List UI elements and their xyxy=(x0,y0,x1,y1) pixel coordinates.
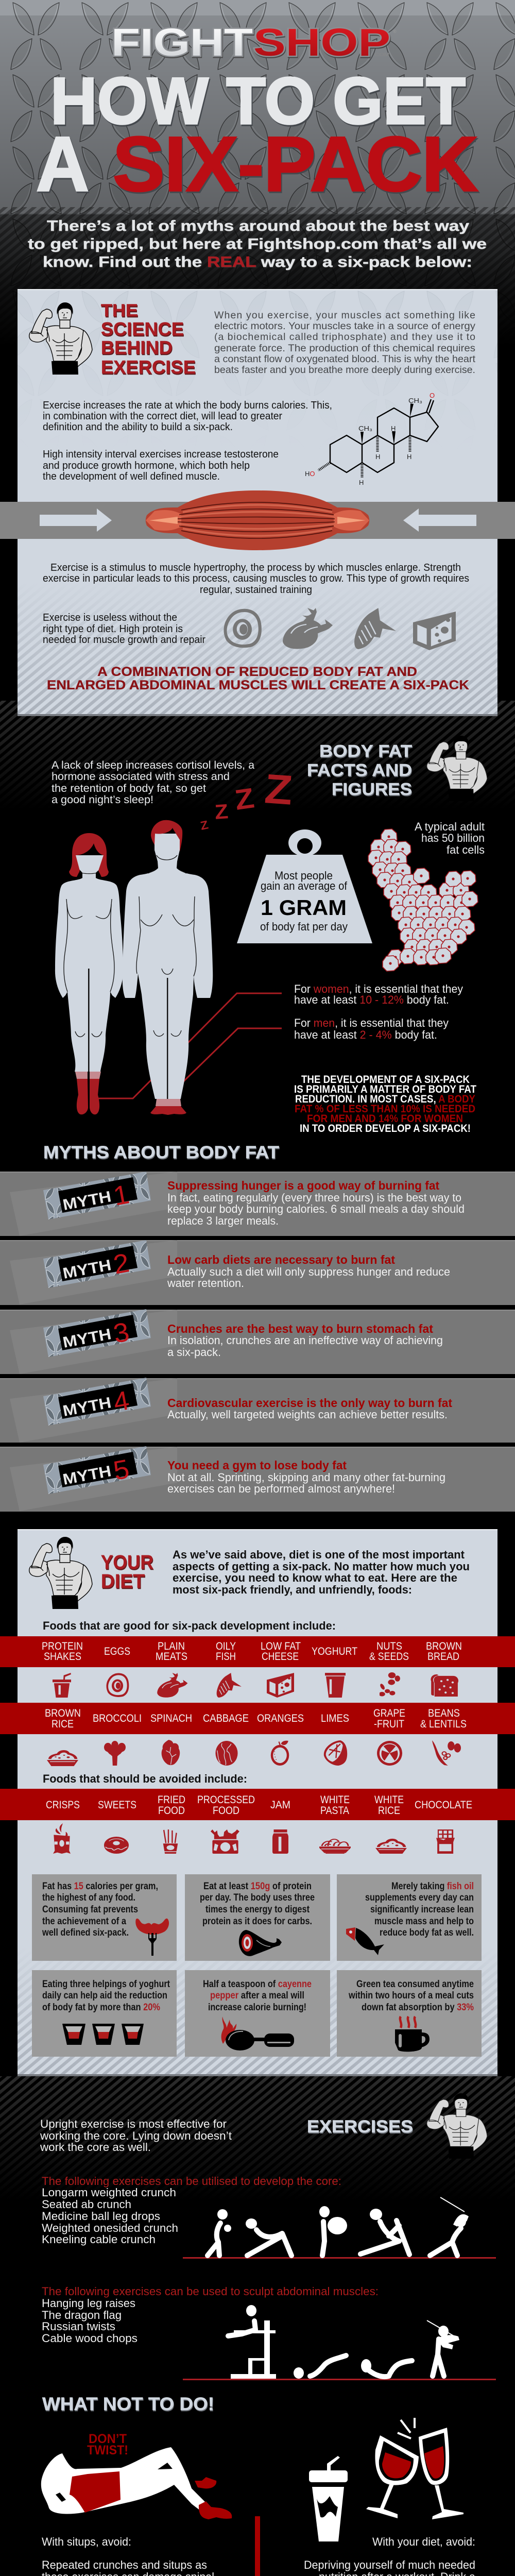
text: lack of sleep: hormone associated with stress and xyxy=(52,771,230,783)
panel: myth 3 xyxy=(0,1309,515,1374)
icon: muscle man diet xyxy=(29,1537,92,1609)
band: good foods labels row 1: MEATS xyxy=(156,1651,187,1663)
icon: sausage on fork xyxy=(135,1919,169,1956)
panel: myth 2: Low carb diets are necessary to burn fat xyxy=(167,1253,395,1266)
panel: myth 1 xyxy=(0,1172,515,1236)
text: calories and hormones xyxy=(43,400,332,482)
card: protein: Eat at least 150g of protein xyxy=(203,1880,312,1892)
band: good foods labels row 2: LIMES xyxy=(321,1713,349,1724)
text: diet and protein: needed for muscle growth and repair xyxy=(43,634,205,646)
icons: good foods row 2 xyxy=(47,1740,461,1766)
text: when you exercise: (a biochemical called triphosphate) and they use it to xyxy=(214,331,475,343)
logo: FightShop top: ® xyxy=(393,29,397,34)
heading: your diet: YOUR xyxy=(101,1552,153,1573)
panel: myth 4 xyxy=(0,1378,515,1443)
text: sculpting exercises list: Hanging leg raises xyxy=(42,2297,135,2310)
icon: muscle man light xyxy=(427,736,487,801)
heading: body fat facts and figures: FACTS AND xyxy=(307,760,412,779)
text: fat cells: has 50 billion xyxy=(421,832,485,844)
text: lack of sleep: the retention of body fat, so get xyxy=(52,783,206,794)
band: good foods labels row 2: & LENTILS xyxy=(420,1718,467,1730)
band: foods to avoid labels: SWEETS xyxy=(98,1799,136,1811)
panel: myth 2: Actually such a diet will only suppress hunger and reduce xyxy=(167,1265,450,1278)
band: good foods labels row 1: FISH xyxy=(216,1651,236,1663)
intro text: to get ripped, but here at Fightshop.com that’s all we xyxy=(28,236,487,252)
card: protein: per day. The body uses three xyxy=(200,1892,315,1903)
icon: three glasses xyxy=(62,2024,144,2045)
card: fat calories: Fat has 15 calories per gram, xyxy=(42,1880,158,1892)
icon: weight with 1 gram text xyxy=(237,829,372,943)
icon: sleeping z letters: Z xyxy=(199,818,210,833)
icon: weight with 1 gram text: 1 GRAM xyxy=(261,895,347,920)
band: good foods labels row 1: & SEEDS xyxy=(369,1651,409,1663)
card: fish oil xyxy=(337,1874,482,1961)
panel: myth 1: In fact, eating regularly (every three hours) is the best way to xyxy=(167,1191,461,1204)
card: cayenne xyxy=(185,1970,330,2057)
intro text: There’s a lot of myths around about the best way xyxy=(47,218,469,234)
panel: myth 5: You need a gym to lose body fat xyxy=(167,1459,347,1472)
intro text: know. Find out the REAL way to a six-pack below: xyxy=(43,254,472,270)
text: core exercises list: Longarm weighted crunch xyxy=(42,2186,176,2199)
chart: testosterone molecule: HO xyxy=(305,470,315,478)
card: green tea: down fat absorption by 33% xyxy=(362,2002,474,2013)
card: cayenne: pepper after a meal will xyxy=(210,1990,304,2001)
text: calories and hormones: the development of well defined muscle. xyxy=(43,471,220,482)
icon: core exercise figures xyxy=(183,2197,496,2259)
band: grey contraction bar xyxy=(0,502,515,539)
text: core exercises list xyxy=(42,2175,341,2246)
text: diet and protein: right type of diet. High protein is xyxy=(43,623,183,635)
callout: six-pack development: FAT % OF LESS THAN 10% IS NEEDED xyxy=(295,1103,475,1115)
chart: testosterone molecule: H xyxy=(375,453,380,461)
card: cayenne: Half a teaspoon of cayenne xyxy=(203,1978,312,1990)
text: upright exercise: Upright exercise is most effective for xyxy=(40,2117,227,2130)
panel: myth 3: MYTH xyxy=(61,1326,113,1351)
band: good foods labels row 1: NUTS xyxy=(376,1640,402,1652)
card: fish oil: supplements every day can xyxy=(365,1892,474,1903)
divider: red vertical line xyxy=(255,2516,260,2576)
text: essential body fat: For men, it is essential that they xyxy=(294,1016,449,1029)
card: protein: protein as it does for carbs. xyxy=(202,1916,312,1927)
subheading: good foods: Foods that are good for six-pack development include: xyxy=(43,1619,336,1632)
callout: six-pack development: IN TO ORDER DEVELOP A SIX-PACK! xyxy=(300,1123,471,1134)
chart: testosterone molecule: CH₃ xyxy=(358,425,372,432)
band: good foods labels row 1: BREAD xyxy=(427,1651,459,1663)
heading: the science behind exercise: BEHIND xyxy=(101,337,173,358)
text: essential body fat: For women, it is essential that they xyxy=(294,982,463,995)
icons: foods to avoid xyxy=(53,1823,455,1854)
text: calories and hormones: High intensity interval exercises increase testosterone xyxy=(43,449,279,460)
callout: six-pack development: IS PRIMARILY A MATTER OF BODY FAT xyxy=(294,1083,476,1095)
card: fat calories: Consuming fat prevents xyxy=(42,1904,138,1915)
icon: weight with 1 gram text: of body fat per day xyxy=(260,920,348,933)
icon: sculpting exercise figures xyxy=(183,2305,496,2380)
band: good foods labels row 1: CHEESE xyxy=(262,1651,299,1663)
text: with your diet avoid xyxy=(303,2535,476,2576)
text: core exercises list: Weighted onesided crunch xyxy=(42,2222,178,2234)
text: lack of sleep: A lack of sleep increases cortisol levels, a xyxy=(52,759,254,771)
text: with your diet avoid: Depriving yourself of much needed xyxy=(304,2558,475,2571)
panel: myth 3: In isolation, crunches are an ineffective way of achieving xyxy=(167,1334,443,1347)
band: good foods labels row 1: YOGHURT xyxy=(312,1646,357,1657)
arrow: left-pointing xyxy=(403,509,476,532)
logo: FightShop top: FIGHT xyxy=(111,21,253,64)
text: core exercises list: Seated ab crunch xyxy=(42,2198,131,2211)
label: don't twist: DON’T xyxy=(89,2432,127,2446)
subheading: foods to avoid: Foods that should be avoided include: xyxy=(43,1772,247,1785)
panel: myth 3: 3 xyxy=(111,1317,132,1349)
icon: muscle man exercises xyxy=(427,2093,487,2159)
band: foods to avoid labels: WHITE xyxy=(374,1794,404,1806)
band: foods to avoid labels: RICE xyxy=(378,1805,400,1817)
icon: fat cells cluster xyxy=(368,829,478,971)
text: diet intro: As we’ve said above, diet is one of the most important xyxy=(173,1548,465,1561)
band: good foods labels row 2: GRAPE xyxy=(373,1707,405,1719)
text: when you exercise: a constant flow of oxygenated blood. This is why the heart xyxy=(214,353,476,365)
band: good foods labels row 1: BROWN xyxy=(426,1640,462,1652)
chart: testosterone molecule: O xyxy=(430,392,435,399)
logo: FightShop top: SHOP xyxy=(253,21,390,64)
intro text xyxy=(28,218,487,270)
callout: six-pack development xyxy=(294,1074,476,1134)
band: foods to avoid labels: WHITE xyxy=(320,1794,350,1806)
card: yoghurt: of body fat by more than 20% xyxy=(42,2002,160,2013)
band: good foods labels row 2: SPINACH xyxy=(150,1713,192,1724)
card: fat calories: well defined six-pack. xyxy=(42,1927,129,1938)
text: calories and hormones: in combination with the correct diet, will lead to greater xyxy=(43,411,282,422)
band: foods to avoid labels xyxy=(0,1789,515,1820)
card: green tea: within two hours of a meal cuts xyxy=(348,1990,474,2001)
text: diet intro xyxy=(173,1548,470,1596)
panel: myth 5: MYTH xyxy=(61,1463,113,1488)
panel: myth 5: Not at all. Sprinting, skipping and many other fat-burning xyxy=(167,1471,445,1484)
icon: flexing muscle man xyxy=(29,302,92,375)
icon: muscle xyxy=(146,490,369,550)
band: good foods labels row 1: OILY xyxy=(216,1640,236,1652)
panel: myth 2 xyxy=(0,1240,515,1305)
band: good foods labels row 1: EGGS xyxy=(104,1646,130,1657)
text: when you exercise: electric motors. Your muscles take in a source of energy xyxy=(214,320,475,332)
label: don't twist xyxy=(87,2432,128,2458)
panel: myth 1: Suppressing hunger is a good way of burning fat xyxy=(167,1179,439,1192)
panel: myth 4: MYTH xyxy=(61,1394,113,1420)
text: hypertrophy: Exercise is a stimulus to muscle hypertrophy, the process by which muscles enlarge. Strength xyxy=(50,562,461,573)
panel: myth 4: 4 xyxy=(111,1385,132,1418)
text: fat cells: fat cells xyxy=(447,843,485,856)
card: green tea xyxy=(337,1970,482,2057)
band: foods to avoid labels: CRISPS xyxy=(46,1799,80,1811)
text: with your diet avoid: With your diet, avoid: xyxy=(372,2535,475,2548)
card: fish oil: reduce body fat as well. xyxy=(380,1927,474,1938)
text: core exercises list: The following exercises can be utilised to develop the core: xyxy=(42,2175,341,2188)
text: sculpting exercises list: The dragon flag xyxy=(42,2309,122,2321)
heading: the science behind exercise: SCIENCE xyxy=(101,318,184,340)
icon: sleeping z letters: Z xyxy=(214,800,229,824)
band: good foods labels row 1: PLAIN xyxy=(158,1640,185,1652)
card: fish oil: Merely taking fish oil xyxy=(391,1880,474,1892)
band: good foods labels row 2: BROWN xyxy=(45,1707,81,1719)
text: when you exercise xyxy=(214,310,476,376)
icon: mug with steam xyxy=(395,2016,430,2052)
heading: body fat facts and figures: BODY FAT xyxy=(319,741,412,760)
text: sculpting exercises list: The following exercises can be used to sculpt abdominal muscles: xyxy=(42,2285,379,2298)
band: good foods labels row 1: SHAKES xyxy=(44,1651,81,1663)
icon: black fish xyxy=(346,1927,384,1955)
icon: situp figure xyxy=(41,2447,232,2519)
callout: combination: A COMBINATION OF REDUCED BODY FAT AND xyxy=(97,665,417,679)
panel: myth 1: MYTH xyxy=(61,1188,113,1214)
card: protein xyxy=(185,1874,330,1961)
title: How to get a six-pack xyxy=(36,64,478,207)
panel: myth 4: Cardiovascular exercise is the only way to burn fat xyxy=(167,1396,452,1410)
panel: myth 5 xyxy=(0,1446,515,1512)
heading: the science behind exercise: THE xyxy=(101,301,138,320)
panel: myth 1: replace 3 larger meals. xyxy=(167,1214,279,1227)
band: foods to avoid labels: PROCESSED xyxy=(197,1794,255,1806)
icon: sleeping z letters: Z xyxy=(233,782,256,816)
card: green tea: Green tea consumed anytime xyxy=(356,1978,474,1990)
text: fat cells: A typical adult xyxy=(415,820,485,833)
background: stripes below diet panel xyxy=(0,2076,515,2200)
card: fish oil: significantly increase lean xyxy=(370,1904,474,1915)
text: diet and protein: Exercise is useless without the xyxy=(43,612,177,623)
band: foods to avoid labels: FOOD xyxy=(158,1805,185,1817)
panel: myth 4: Actually, well targeted weights can achieve better results. xyxy=(167,1408,448,1421)
text: hypertrophy: regular, sustained training xyxy=(200,584,312,596)
connector lines: figures to body fat text xyxy=(98,993,282,1098)
card: cayenne: increase calorie burning! xyxy=(208,2002,306,2013)
panel: myth 1: keep your body burning calories. 6 small meals a day should xyxy=(167,1202,465,1215)
card: yoghurt xyxy=(32,1970,177,2057)
panel: myth 2: 2 xyxy=(111,1248,132,1280)
heading: your diet: DIET xyxy=(101,1571,145,1592)
panel: myth 3: Crunches are the best way to burn stomach fat xyxy=(167,1322,433,1335)
band: foods to avoid labels: JAM xyxy=(270,1799,290,1811)
text: calories and hormones: definition and the ability to build a six-pack. xyxy=(43,421,233,433)
text: lack of sleep xyxy=(52,759,254,806)
text: core exercises list: Medicine ball leg drops xyxy=(42,2210,160,2223)
text: upright exercise xyxy=(40,2117,232,2154)
heading: your diet xyxy=(101,1552,153,1592)
band: good foods labels row 2: BROCCOLI xyxy=(93,1713,142,1724)
heading: exercises: EXERCISES xyxy=(307,2117,413,2137)
text: sculpting exercises list: Cable wood chops xyxy=(42,2332,138,2345)
text: essential body fat xyxy=(294,982,463,1041)
figure: man xyxy=(123,820,213,1115)
text: with situps avoid: With situps, avoid: xyxy=(42,2535,131,2548)
chart: testosterone molecule: H xyxy=(391,425,396,432)
chart: testosterone molecule: H xyxy=(407,453,411,461)
icon: weight with 1 gram text: gain an average of xyxy=(261,879,348,892)
panel: myth 3: a six-pack. xyxy=(167,1346,221,1359)
callout: combination xyxy=(47,665,469,692)
text: lack of sleep: a good night’s sleep! xyxy=(52,794,153,806)
title: How to get a six-pack: HOW TO GET xyxy=(50,64,466,138)
card: fat calories: the highest of any food. xyxy=(42,1892,135,1903)
chart: testosterone molecule: CH₃ xyxy=(408,397,422,404)
band: good foods labels row 1: PROTEIN xyxy=(42,1640,83,1652)
text: calories and hormones: Exercise increases the rate at which the body burns calories. This, xyxy=(43,400,332,411)
icon: protein shake xyxy=(309,2456,348,2541)
panel: myth 5: 5 xyxy=(111,1454,132,1486)
panel: myth 1: 1 xyxy=(111,1179,132,1212)
figure: woman xyxy=(55,833,123,1114)
text: sculpting exercises list xyxy=(42,2285,379,2345)
chart: testosterone molecule: H xyxy=(359,479,364,486)
text: sculpting exercises list: Russian twists xyxy=(42,2320,115,2333)
heading: the science behind exercise: EXERCISE xyxy=(101,357,196,378)
panel: myth 5: exercises can be performed almost anywhere! xyxy=(167,1482,395,1495)
icon: spoon with flame xyxy=(221,2016,294,2050)
band: foods to avoid labels: CHOCOLATE xyxy=(415,1799,472,1811)
panel: your diet xyxy=(18,1529,497,2076)
card: fish oil: muscle mass and help to xyxy=(374,1916,474,1927)
band: good foods labels row 1 xyxy=(0,1636,515,1667)
band: good foods labels row 2: CABBAGE xyxy=(203,1713,249,1724)
band: good foods labels row 2: BEANS xyxy=(428,1707,460,1719)
text: upright exercise: work the core as well. xyxy=(40,2141,151,2154)
text: essential body fat: have at least 10 - 12% body fat. xyxy=(294,993,449,1006)
card: yoghurt: daily can help aid the reduction xyxy=(42,1990,167,2001)
band: good foods labels row 2: RICE xyxy=(52,1718,74,1730)
text: when you exercise: When you exercise, your muscles act something like xyxy=(214,310,475,321)
text: essential body fat: have at least 2 - 4% body fat. xyxy=(294,1028,437,1041)
icons: good foods row 1 xyxy=(53,1672,458,1698)
icon: wine glasses xyxy=(366,2418,464,2519)
heading: the science behind exercise xyxy=(101,301,196,378)
background: stripes below first panel xyxy=(0,701,515,809)
callout: six-pack development: THE DEVELOPMENT OF A SIX-PACK xyxy=(301,1074,470,1086)
icon: sleeping z letters: Z xyxy=(263,765,294,814)
icon: weight with 1 gram text: Most people xyxy=(274,869,333,882)
heading: myths about body fat: MYTHS ABOUT BODY FAT xyxy=(43,1143,279,1162)
text: core exercises list: Kneeling cable crunch xyxy=(42,2233,156,2246)
card: yoghurt: Eating three helpings of yoghurt xyxy=(42,1978,170,1990)
callout: combination: ENLARGED ABDOMINAL MUSCLES WILL CREATE A SIX-PACK xyxy=(47,678,469,692)
panel: the science behind exercise xyxy=(18,289,497,716)
text: hypertrophy: exercise in particular leads to this process, causing muscles to grow. This type of growth requires xyxy=(43,573,469,584)
callout: six-pack development: FOR MEN AND 14% FOR WOMEN xyxy=(307,1113,463,1125)
card: protein: times the energy to digest xyxy=(205,1904,310,1915)
band: good foods labels row 2: -FRUIT xyxy=(374,1718,404,1730)
text: diet intro: aspects of getting a six-pack. No matter how much you xyxy=(173,1560,470,1573)
background: top metal plate xyxy=(0,0,515,345)
band: foods to avoid labels: PASTA xyxy=(320,1805,349,1817)
panel: myth 2: water retention. xyxy=(167,1277,244,1290)
band: foods to avoid labels: FRIED xyxy=(158,1794,185,1806)
text: diet intro: most six-pack friendly, and unfriendly, foods: xyxy=(173,1583,412,1596)
band: good foods labels row 2 xyxy=(0,1703,515,1734)
logo: FightShop top xyxy=(111,21,397,64)
text: upright exercise: working the core. Lying down doesn’t xyxy=(40,2129,232,2142)
heading: body fat facts and figures xyxy=(307,741,412,799)
panel: myth 2: MYTH xyxy=(61,1257,113,1282)
arrow: right-pointing xyxy=(40,509,112,532)
text: diet intro: exercise, you need to know what to eat. Here are the xyxy=(173,1571,457,1584)
callout: six-pack development: REDUCTION. IN MOST CASES, A BODY xyxy=(295,1093,475,1105)
band: foods to avoid labels: FOOD xyxy=(213,1805,239,1817)
band: good foods labels row 2: ORANGES xyxy=(257,1713,304,1724)
card: fat calories: the achievement of a xyxy=(42,1916,126,1927)
text: when you exercise: generate force. The production of this chemical requires xyxy=(214,343,475,354)
text: with situps avoid xyxy=(42,2535,234,2576)
icon: sleeping z letters xyxy=(199,765,294,833)
logo: FightShop top: .COM xyxy=(373,52,389,57)
text: calories and hormones: and produce growth hormone, which both help xyxy=(43,460,250,471)
text: when you exercise: beats faster and you breathe more deeply during exercise. xyxy=(214,364,475,376)
card: fat calories xyxy=(32,1874,177,1961)
icon: ham xyxy=(239,1930,282,1956)
text: with situps avoid: Repeated crunches and situps as xyxy=(42,2558,207,2571)
text: hypertrophy xyxy=(43,562,469,596)
heading: what not to do: WHAT NOT TO DO! xyxy=(42,2394,214,2414)
title: How to get a six-pack: A xyxy=(36,121,89,207)
label: don't twist: TWIST! xyxy=(87,2443,128,2458)
band: good foods labels row 1: LOW FAT xyxy=(261,1640,301,1652)
chart: testosterone molecule xyxy=(305,392,438,486)
text: fat cells xyxy=(415,820,485,856)
title: How to get a six-pack: SIX-PACK xyxy=(113,121,478,207)
text: diet and protein xyxy=(43,612,205,646)
icons: protein foods xyxy=(224,608,456,650)
heading: body fat facts and figures: FIGURES xyxy=(332,779,412,799)
